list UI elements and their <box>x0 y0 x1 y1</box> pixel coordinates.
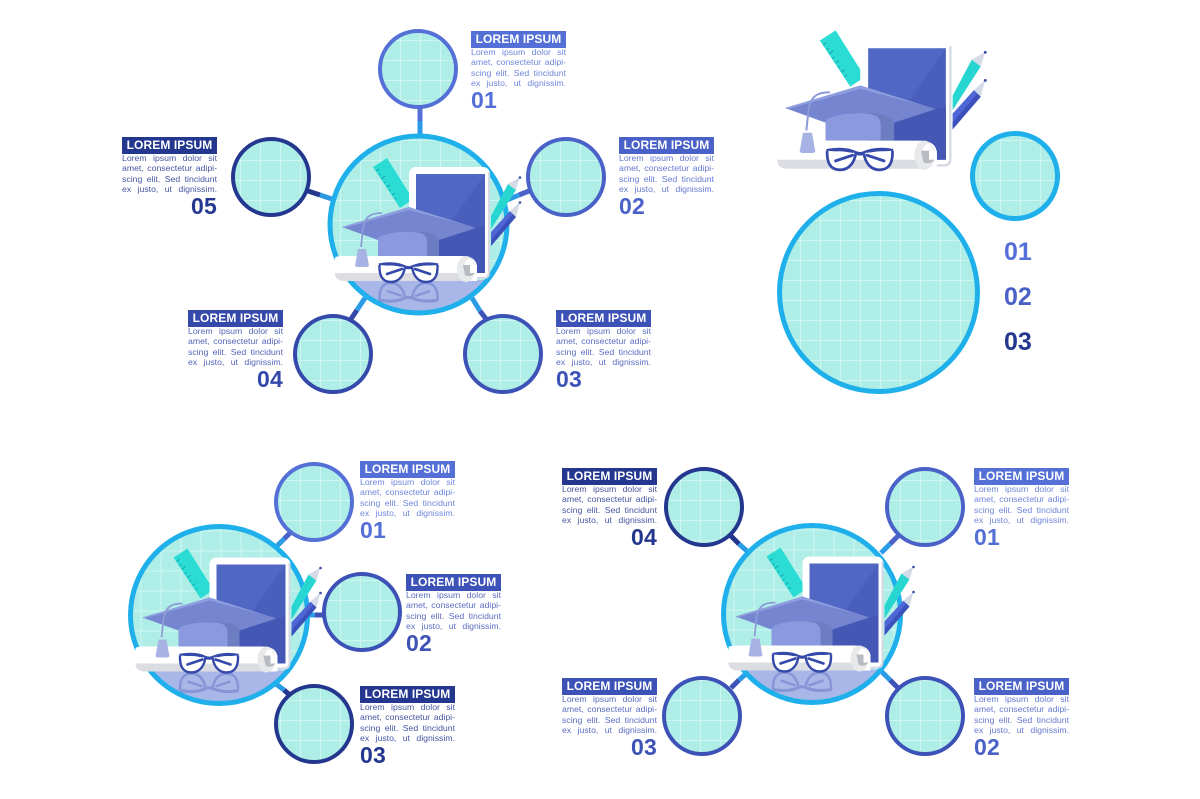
text block 01: scing elit. Sed tincidunt <box>360 498 455 508</box>
large circle <box>780 194 978 392</box>
node circle 05 <box>233 139 309 215</box>
text block 04: LOREM IPSUM <box>567 469 652 483</box>
text block 04: Lorem ipsum dolor sit <box>188 326 283 336</box>
text block 02: Lorem ipsum dolor sit <box>974 694 1069 704</box>
node circle 03 <box>276 686 352 762</box>
text block 04: amet, consectetur adipi- <box>188 336 283 346</box>
number 01: 01 <box>1004 238 1032 266</box>
text block 03 <box>562 678 657 760</box>
text block 02: scing elit. Sed tincidunt <box>406 611 501 621</box>
icon: graduation illustration <box>777 30 987 170</box>
text block 03: LOREM IPSUM <box>561 311 646 325</box>
text block 03: amet, consectetur adipi- <box>556 336 651 346</box>
text block 04: amet, consectetur adipi- <box>562 494 657 504</box>
text block 01: LOREM IPSUM <box>476 32 561 46</box>
text block 02: 02 <box>974 734 1000 760</box>
text block 04 <box>188 310 283 392</box>
node circle 02 <box>324 574 400 650</box>
text block 05: Lorem ipsum dolor sit <box>122 153 217 163</box>
text block 02: Lorem ipsum dolor sit <box>406 590 501 600</box>
text block 03: amet, consectetur adipi- <box>562 704 657 714</box>
number 03: 03 <box>1004 328 1032 356</box>
text block 02: ex justo, ut dignissim. <box>619 184 714 194</box>
text block 03: ex justo, ut dignissim. <box>562 725 657 735</box>
text block 03: ex justo, ut dignissim. <box>360 733 455 743</box>
text block 01 <box>471 31 566 113</box>
panel: three-step diagram <box>128 461 501 768</box>
text block 02: amet, consectetur adipi- <box>619 163 714 173</box>
panel: four-step diagram <box>562 467 1069 760</box>
text block 03: Lorem ipsum dolor sit <box>556 326 651 336</box>
text block 01 <box>974 468 1069 550</box>
text block 02: ex justo, ut dignissim. <box>974 725 1069 735</box>
text block 01: scing elit. Sed tincidunt <box>974 505 1069 515</box>
text block 04: scing elit. Sed tincidunt <box>562 505 657 515</box>
text block 05: amet, consectetur adipi- <box>122 163 217 173</box>
text block 01: ex justo, ut dignissim. <box>471 78 566 88</box>
text block 04: LOREM IPSUM <box>193 311 278 325</box>
text block 03 <box>360 686 455 768</box>
text block 02: 02 <box>619 193 645 219</box>
central circle with graduation illustration <box>130 526 322 710</box>
central circle with graduation illustration <box>330 136 521 320</box>
text block 04 <box>562 468 657 550</box>
connectors <box>731 536 898 688</box>
text block 03: amet, consectetur adipi- <box>360 712 455 722</box>
text block 03: 03 <box>360 742 386 768</box>
text block 02 <box>619 137 714 219</box>
text block 02: amet, consectetur adipi- <box>406 600 501 610</box>
text block 01: LOREM IPSUM <box>365 462 450 476</box>
text block 02: scing elit. Sed tincidunt <box>619 174 714 184</box>
small circle <box>972 134 1058 218</box>
panel: five-step diagram <box>122 29 714 394</box>
text block 01: 01 <box>471 87 497 113</box>
node circle 04 <box>666 469 742 545</box>
text block 01: 01 <box>974 524 1000 550</box>
text block 03: Lorem ipsum dolor sit <box>360 702 455 712</box>
node circle 01 <box>380 31 456 107</box>
connectors <box>308 106 529 324</box>
text block 01 <box>360 461 455 543</box>
text block 02: Lorem ipsum dolor sit <box>619 153 714 163</box>
text block 01: ex justo, ut dignissim. <box>974 515 1069 525</box>
text block 03: scing elit. Sed tincidunt <box>562 715 657 725</box>
text block 03: LOREM IPSUM <box>365 687 450 701</box>
text block 03: 03 <box>631 734 657 760</box>
text block 02: LOREM IPSUM <box>979 679 1064 693</box>
text block 01: amet, consectetur adipi- <box>360 487 455 497</box>
text block 02: 02 <box>406 630 432 656</box>
text block 05: 05 <box>191 193 217 219</box>
text block 04: ex justo, ut dignissim. <box>188 357 283 367</box>
text block 03: scing elit. Sed tincidunt <box>556 347 651 357</box>
text block 03 <box>556 310 651 392</box>
text block 04: Lorem ipsum dolor sit <box>562 484 657 494</box>
text block 04: 04 <box>631 524 657 550</box>
text block 02: ex justo, ut dignissim. <box>406 621 501 631</box>
text block 05: scing elit. Sed tincidunt <box>122 174 217 184</box>
number 02: 02 <box>1004 283 1032 311</box>
text block 02: LOREM IPSUM <box>624 138 709 152</box>
text block 02: scing elit. Sed tincidunt <box>974 715 1069 725</box>
node circle 01 <box>276 464 352 540</box>
node circle 03 <box>465 316 541 392</box>
text block 04: scing elit. Sed tincidunt <box>188 347 283 357</box>
text block 04: ex justo, ut dignissim. <box>562 515 657 525</box>
text block 01: ex justo, ut dignissim. <box>360 508 455 518</box>
text block 01: amet, consectetur adipi- <box>471 57 566 67</box>
text block 02: LOREM IPSUM <box>411 575 496 589</box>
text block 04: 04 <box>257 366 283 392</box>
text block 01: LOREM IPSUM <box>979 469 1064 483</box>
text block 01: 01 <box>360 517 386 543</box>
node circle 04 <box>295 316 371 392</box>
text block 01: scing elit. Sed tincidunt <box>471 68 566 78</box>
text block 03: ex justo, ut dignissim. <box>556 357 651 367</box>
text block 03: LOREM IPSUM <box>567 679 652 693</box>
text block 02 <box>406 574 501 656</box>
text block 02 <box>974 678 1069 760</box>
text block 03: 03 <box>556 366 582 392</box>
text block 03: scing elit. Sed tincidunt <box>360 723 455 733</box>
text block 05: ex justo, ut dignissim. <box>122 184 217 194</box>
central circle with graduation illustration <box>724 526 915 710</box>
text block 05 <box>122 137 217 219</box>
text block 03: Lorem ipsum dolor sit <box>562 694 657 704</box>
text block 02: amet, consectetur adipi- <box>974 704 1069 714</box>
node circle 03 <box>664 678 740 754</box>
text block 01: Lorem ipsum dolor sit <box>471 47 566 57</box>
text block 01: Lorem ipsum dolor sit <box>360 477 455 487</box>
node circle 02 <box>887 678 963 754</box>
node circle 02 <box>528 139 604 215</box>
text block 01: Lorem ipsum dolor sit <box>974 484 1069 494</box>
text block 05: LOREM IPSUM <box>127 138 212 152</box>
text block 01: amet, consectetur adipi- <box>974 494 1069 504</box>
node circle 01 <box>887 469 963 545</box>
connectors <box>276 532 325 697</box>
panel: template elements <box>777 30 1060 394</box>
